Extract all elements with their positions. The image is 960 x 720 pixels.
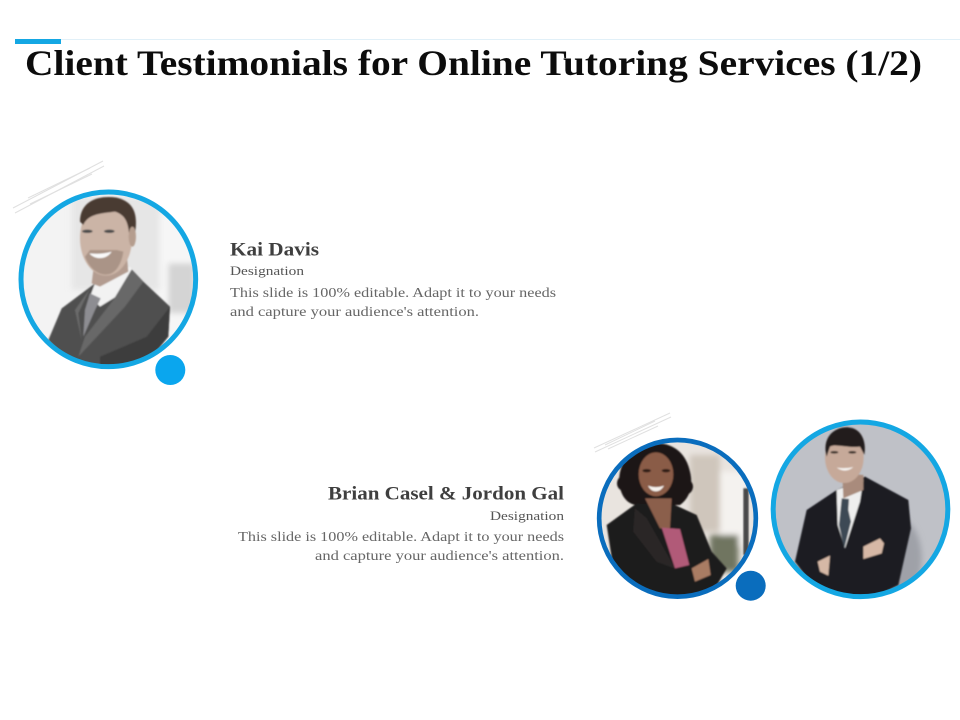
- testimonial: Kai Davis: [13, 161, 556, 385]
- description: This slide is 100% editable. Adapt it to your needs: [230, 286, 556, 301]
- portrait: woman: [597, 438, 760, 602]
- name: Kai Davis: [230, 240, 319, 260]
- designation: Designation: [490, 508, 565, 523]
- accent dot: [155, 355, 185, 385]
- accent dot: [736, 571, 766, 601]
- designation: Designation: [230, 263, 305, 278]
- description: and capture your audience's attention.: [315, 549, 564, 564]
- decorative hatch lines: [594, 413, 671, 452]
- header rule: [15, 39, 960, 44]
- decorative hatch lines: [13, 161, 104, 213]
- testimonial: Brian Casel & Jordon Gal: [238, 413, 952, 602]
- portrait: Kai Davis: [17, 187, 203, 373]
- description: [238, 530, 564, 564]
- title: Client Testimonials for Online Tutoring Services (1/2): [25, 43, 922, 83]
- description: and capture your audience's attention.: [230, 305, 479, 320]
- name: Brian Casel & Jordon Gal: [328, 484, 564, 504]
- description: [230, 286, 556, 320]
- portrait: man in dark suit: [770, 420, 952, 602]
- description: This slide is 100% editable. Adapt it to your needs: [238, 530, 564, 545]
